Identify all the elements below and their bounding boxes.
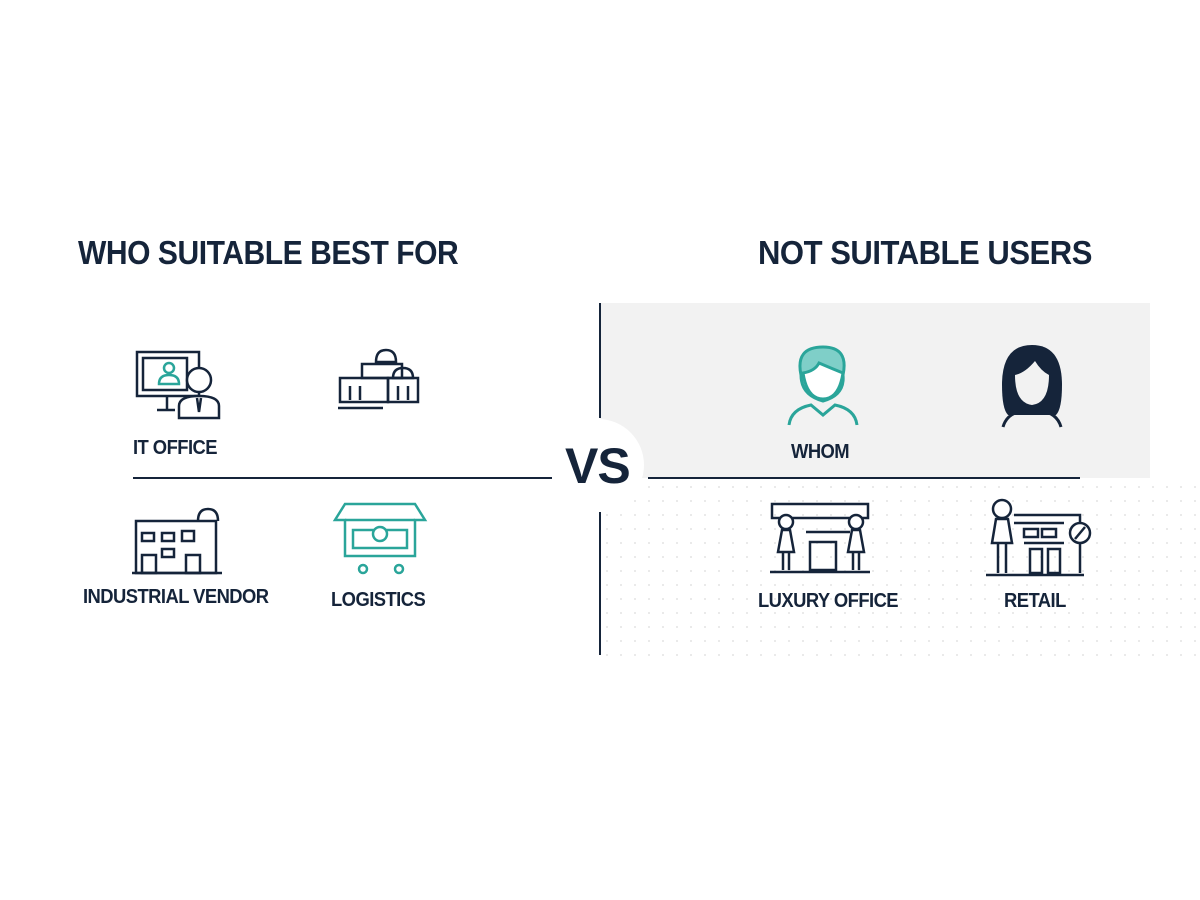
icon: luxury office	[770, 502, 870, 574]
title: not suitable users: NOT SUITABLE USERS	[758, 234, 1092, 271]
label: logistics: LOGISTICS	[331, 589, 425, 611]
label: IT office: IT OFFICE	[133, 437, 217, 459]
icon: retail	[986, 498, 1092, 576]
panel: not suitable background	[600, 303, 1150, 478]
icon: IT office	[136, 350, 220, 420]
label: whom: WHOM	[791, 441, 849, 463]
icon: man (teal)	[788, 346, 858, 426]
title: who suitable best for: WHO SUITABLE BEST FOR	[78, 234, 458, 271]
icon: warehouse	[338, 348, 420, 410]
dotted background	[600, 480, 1200, 660]
icon: logistics cart	[332, 502, 428, 574]
VS label: VS	[565, 438, 630, 494]
label: luxury office: LUXURY OFFICE	[758, 590, 898, 612]
label: industrial vendor: INDUSTRIAL VENDOR	[83, 586, 269, 608]
label: retail: RETAIL	[1004, 590, 1066, 612]
icon: woman (navy)	[1002, 345, 1062, 428]
icon: industrial building	[132, 508, 222, 574]
